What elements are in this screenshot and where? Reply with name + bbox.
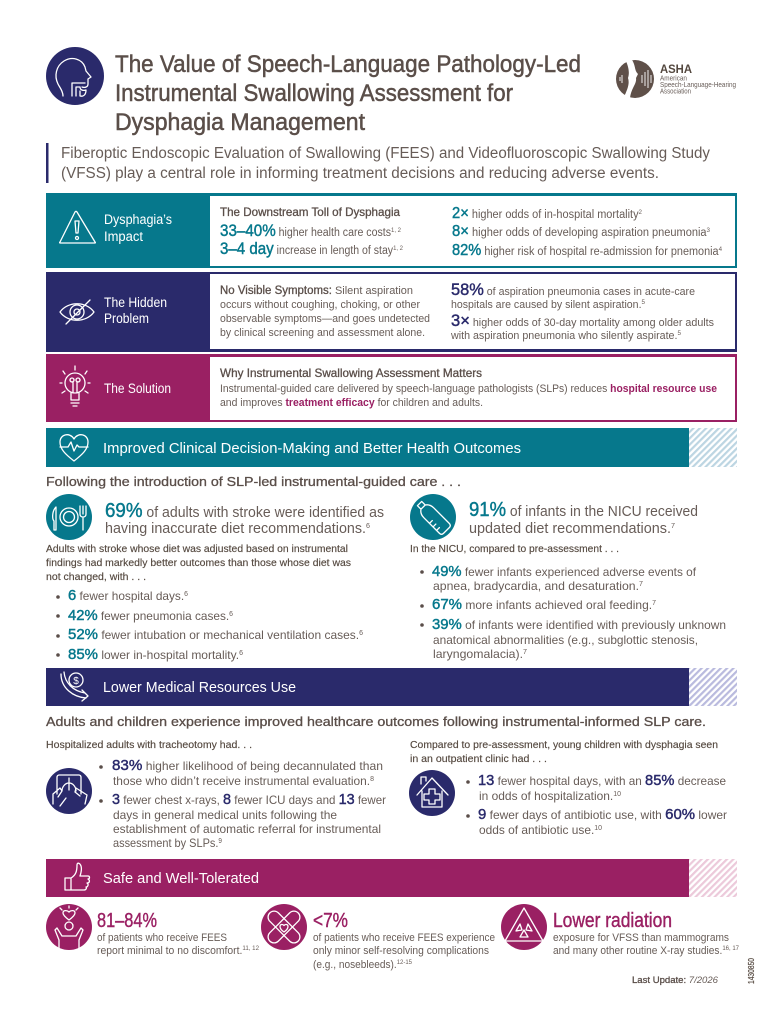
stat: 6 [366,521,370,530]
bullet list: days in general medical units following the [113,808,337,822]
bullet list: 9 fewer days of antibiotic use, with 60% lower [478,806,727,823]
description: No Visible Symptoms: Silent aspiration [220,285,413,297]
heading: Safe and Well-Tolerated [103,870,259,887]
left stats [220,205,403,258]
right stats [452,205,722,259]
document number: 1430850 [747,958,756,984]
subtitle [46,143,710,183]
bullet list [420,563,726,661]
icon: head and throat [46,47,104,105]
description: occurs without coughing, choking, or other [220,299,420,311]
logo: ASHA [616,60,736,98]
left stats: 3–4 day increase in length of stay [220,240,404,258]
description: by clinical screening and assessment alone. [220,327,425,339]
intro text [46,543,351,583]
bullet list: 83% higher likelihood of being decannulated than [112,757,383,774]
last update: Last Update: 7/2026 [632,975,719,986]
stat [313,910,495,971]
label: Dysphagia’s [104,212,172,227]
right stats: 2 [639,209,642,216]
icon: hands holding tablet [46,768,92,814]
stat: (e.g., nosebleeds). [313,959,404,971]
left stats: 33–40% higher health care costs [220,222,401,240]
panel: the solution [46,354,737,422]
logo: ASHA: American [660,74,687,82]
icon: person holding heart [46,904,92,950]
stats: 3× higher odds of 30-day mortality among older adults [451,311,714,330]
icon: light bulb [60,366,90,406]
logo: ASHA: ASHA [660,64,692,76]
bullet list: 52% fewer intubation or mechanical ventilation cases. [68,626,359,643]
stats: 5 [642,299,645,306]
right stats: 3 [707,227,710,234]
stat: 69% of adults with stroke were identified as [105,500,384,522]
intro text: In the NICU, compared to pre-assessment . . . [410,543,619,555]
label: Problem [104,311,149,326]
label [104,295,167,326]
block: hospitalized adults with tracheotomy [46,739,386,850]
stat: only minor self-resolving complications [313,945,489,957]
bullet list: odds of antibiotic use. [479,823,595,837]
stat: 91% of infants in the NICU received [469,499,698,521]
stat: exposure for VFSS than mammograms [553,932,729,944]
bullet list [56,587,363,663]
bullet list: 67% more infants achieved oral feeding. [432,596,652,613]
block: self-resolving complications [256,899,495,971]
stat: <7% [313,910,348,932]
title [115,51,581,136]
right stats: 4 [719,246,722,253]
bullet list: 42% fewer pneumonia cases. [68,607,231,624]
bullet list: 6 [239,650,243,657]
intro text: Adults with stroke whose diet was adjusted based on instrumental [46,543,348,555]
stat [553,910,739,957]
section band: improved clinical decision-making [46,428,737,467]
title: Dysphagia Management [115,109,365,136]
label: Impact [104,229,143,244]
bullet list: 85% lower in-hospital mortality. [68,646,239,663]
left stats: 1, 2 [393,245,403,252]
description: and improves treatment efficacy for children and adults. [220,397,483,409]
panel: the hidden problem [46,272,737,352]
stat: 12-15 [397,959,412,966]
stat: of patients who receive FEES [97,932,227,944]
intro text: Compared to pre-assessment, young children with dysphagia seen [410,739,718,751]
panel: dysphagia's impact [46,193,737,268]
bullet list: 7 [523,649,527,656]
bullet list: 49% fewer infants experienced adverse events of [432,563,697,580]
block: infants in the NICU [410,494,726,661]
stats: 58% of aspiration pneumonia cases in acute-care [451,280,695,299]
stat: and many other routine X-ray studies. [553,945,736,957]
subheading: following the introduction: Following the introduction of SLP-led instrumental-guided care . . . [46,474,461,489]
icon: crossed-out eye [60,300,94,324]
description [220,285,430,339]
stat: 11, 12 [242,945,259,952]
stat [97,910,259,957]
right stats: 2× higher odds of in-hospital mortality [452,205,647,222]
heading: Lower Medical Resources Use [103,679,296,696]
block: young children outpatient [409,739,727,837]
bullet list: 39% of infants were identified with previously unknown [432,616,726,633]
bullet list: in odds of hospitalization. [479,789,614,803]
bullet list: 6 [229,611,233,618]
stats: with aspiration pneumonia who silently aspirate. [451,330,684,342]
section band: safe and well-tolerated [46,859,737,897]
bullet list: 6 [184,591,188,598]
stat [469,499,698,537]
bullet list: establishment of automatic referral for instrumental [113,822,381,836]
stats: 5 [677,330,681,337]
intro text [410,739,718,765]
bullet list: 10 [613,791,621,798]
bullet list: laryngomalacia). [433,647,521,661]
right stats: 82% higher risk of hospital re-admission for pnemonia [452,242,733,259]
block: lower radiation [501,904,739,957]
bullet list: 13 fewer hospital days, with an 85% decrease [478,772,726,789]
bullet list: 7 [652,600,656,607]
subtitle: (VFSS) play a central role in informing treatment decisions and reducing adverse events. [61,165,659,182]
bullet list: assessment by SLPs. [113,836,228,850]
stats: hospitals are caused by silent aspiration. [451,299,649,311]
block: adults with stroke [46,494,384,663]
bullet list: 7 [639,581,643,588]
stat: 16, 17 [722,945,739,952]
bullet list: 6 [359,630,363,637]
title: Instrumental Swallowing Assessment for [115,80,513,107]
stat: report minimal to no discomfort. [97,945,251,957]
label: The Hidden [104,295,167,310]
section band: lower medical resources use [46,668,737,706]
stat: Lower radiation [553,910,672,932]
icon: dollar with down arrow [61,672,88,701]
left stats: The Downstream Toll of Dysphagia [220,205,400,219]
right stats: 8× higher odds of developing aspiration pneumonia [452,223,717,240]
label [104,212,172,244]
title: The Value of Speech-Language Pathology-Led [115,51,581,78]
bullet list [99,757,386,850]
left stats: 1, 2 [391,227,401,234]
bullet list: 8 [370,776,374,783]
icon: baby bottle [410,494,456,540]
bullet list: 9 [218,838,222,845]
description: observable symptoms—and goes undetected [220,313,430,325]
bullet list [466,772,727,837]
bullet list: 6 fewer hospital days. [68,587,186,604]
intro text: Hospitalized adults with tracheotomy had. . . [46,739,252,751]
intro text: in an outpatient clinic had . . . [410,753,547,765]
icon: plate and cutlery [46,494,92,540]
bullet list: apnea, bradycardia, and desaturation. [433,579,635,593]
subheading: adults and children: Adults and children experience improved healthcare outcomes following instrumental-informed SLP care. [46,714,706,729]
icon: dollar with down arrow: $ [73,676,79,687]
description: Why Instrumental Swallowing Assessment Matters [220,366,482,380]
bullet list: anatomical abnormalities (e.g., subglottic stenosis, [433,633,698,647]
icon: warning triangle [60,211,95,243]
icon: heart with pulse [60,435,88,461]
stat: updated diet recommendations. [469,520,679,537]
block: minimal discomfort [46,904,259,957]
stat [105,500,384,537]
stat: 81–84% [97,910,157,932]
stats [450,280,714,342]
bullet list: 10 [594,825,602,832]
logo: ASHA: Speech-Language-Hearing [660,80,736,89]
subtitle: Fiberoptic Endoscopic Evaluation of Swallowing (FEES) and Videofluoroscopic Swallowing Study [61,145,710,162]
description: Instrumental-guided care delivered by speech-language pathologists (SLPs) reduces hospital resource use [220,383,717,395]
icon: crossed bandages [256,899,312,955]
bullet list: 3 fewer chest x-rays, 8 fewer ICU days and 13 fewer [112,791,386,808]
label: The Solution [104,381,171,396]
logo: ASHA: Association [660,86,691,96]
heading: Improved Clinical Decision-Making and Better Health Outcomes [103,440,521,457]
intro text: findings had markedly better outcomes than those whose diet was [46,557,351,569]
stat: 7 [671,521,675,530]
icon: house with cross [409,770,455,816]
icon: thumbs up [65,863,90,890]
intro text: not changed, with . . . [46,571,146,583]
bullet list: those who didn’t receive instrumental evaluation. [113,774,372,788]
stat: having inaccurate diet recommendations. [105,520,378,537]
description [220,366,717,409]
stat: of patients who receive FEES experience [313,932,495,944]
icon: radiation triangle [501,904,547,950]
